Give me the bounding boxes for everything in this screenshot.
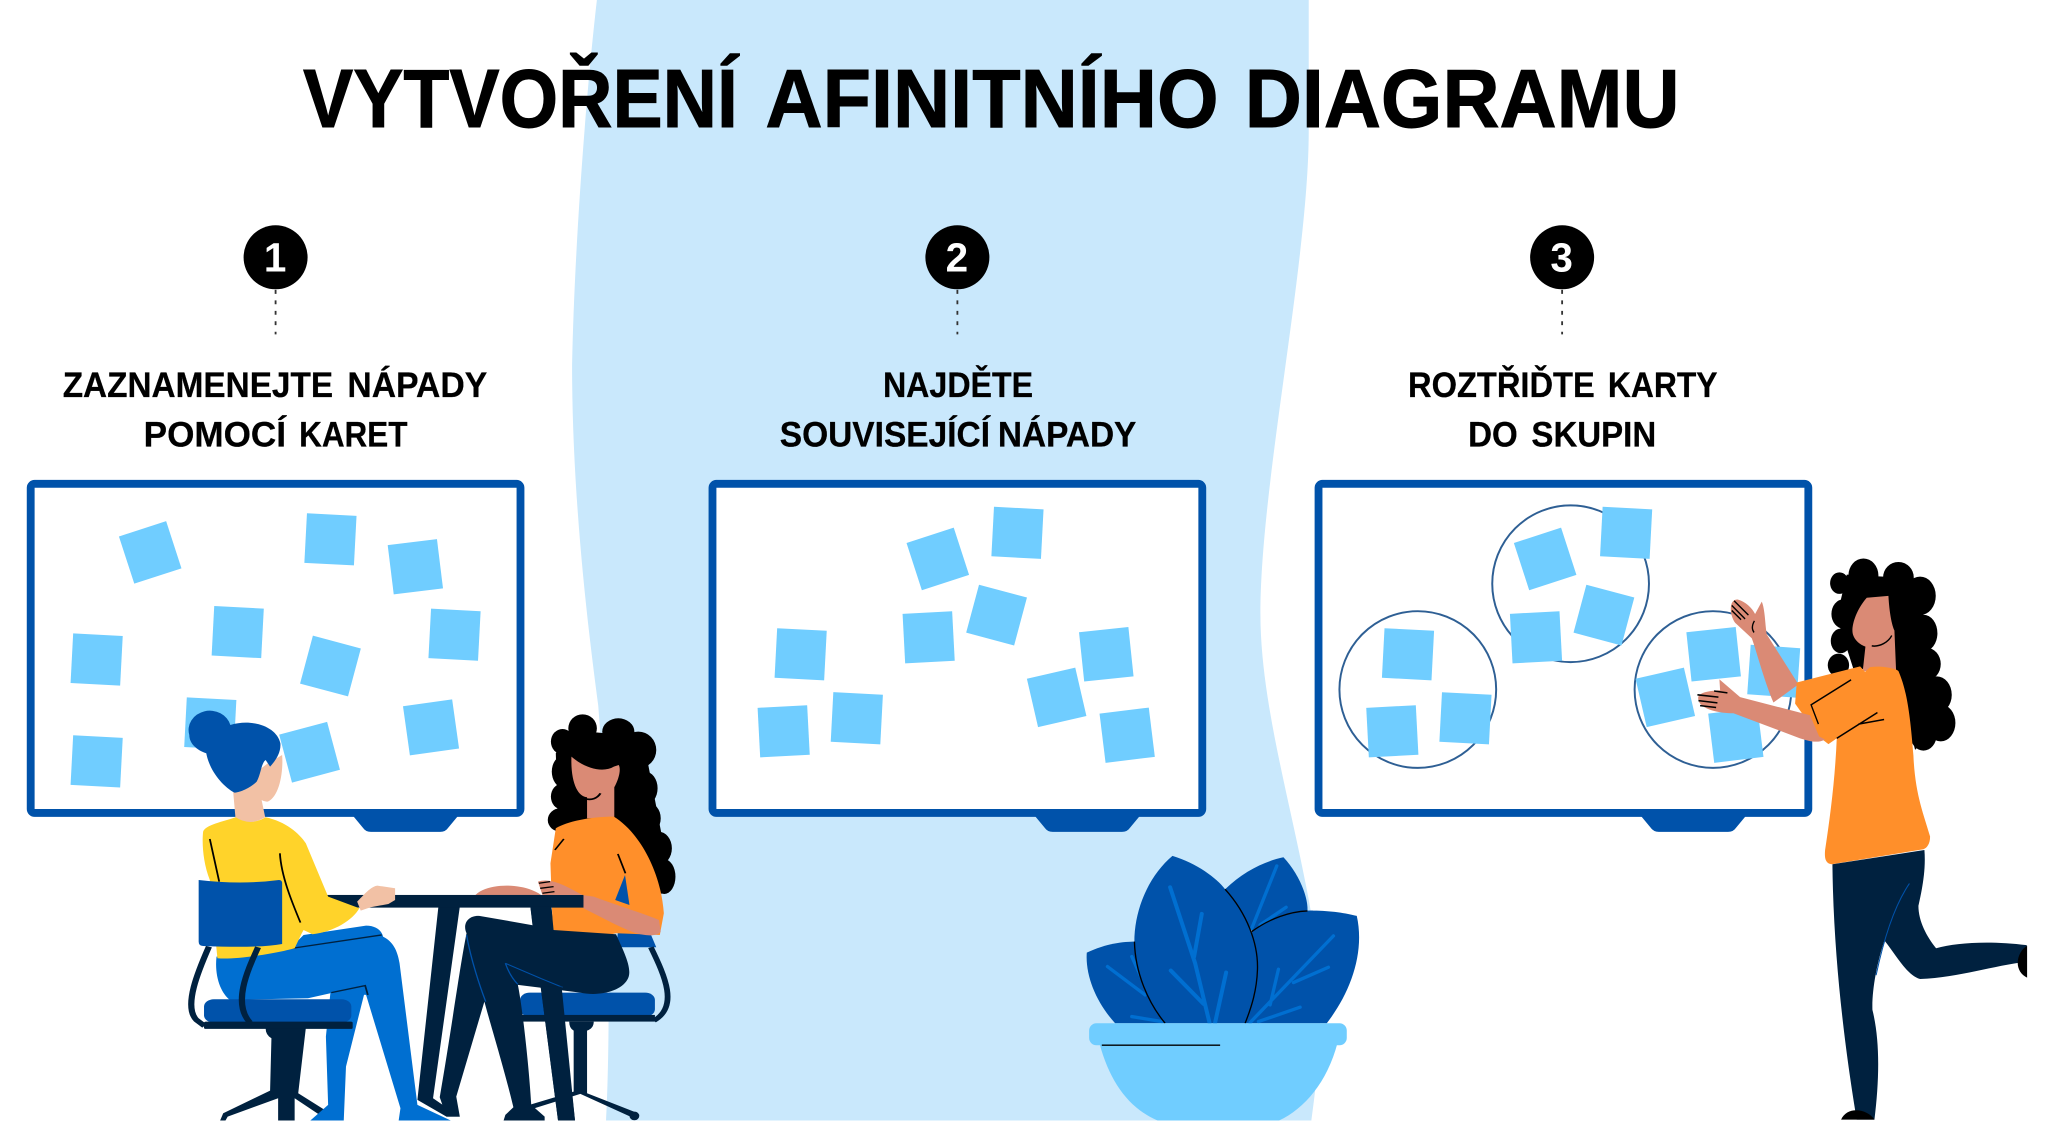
left chair base (220, 1028, 333, 1121)
upper arm (1731, 600, 1798, 703)
step 2 marker (925, 225, 989, 334)
step 2 heading: NÁPADY (998, 415, 1136, 455)
step 1 marker (244, 225, 308, 334)
hair (1828, 558, 1955, 751)
step 1 marker: 1 (264, 235, 286, 281)
shoes (1841, 945, 2028, 1120)
board 3 with grouped notes (1319, 484, 1808, 832)
board 2 with related notes (712, 484, 1202, 832)
board 1 with scattered notes (31, 484, 520, 832)
step 2 marker: 2 (946, 235, 968, 281)
step 1 heading: ZAZNAMENEJTE (63, 366, 333, 405)
step 3 marker: 3 (1550, 235, 1573, 281)
front arm (1698, 679, 1825, 742)
step 2 heading (780, 365, 1136, 455)
title: AFINITNÍHO (765, 54, 1219, 145)
step 3 heading (1408, 365, 1718, 455)
right chair (520, 933, 670, 1120)
step 1 heading: KARET (299, 416, 408, 455)
left woman (189, 711, 451, 1121)
step 1 heading (63, 365, 487, 455)
title: DIAGRAMU (1245, 54, 1680, 145)
title (303, 54, 1680, 145)
illustration: two women at table (189, 711, 675, 1121)
step 1 heading: NÁPADY (347, 365, 487, 405)
step 3 heading: DO (1468, 416, 1518, 455)
step 3 heading: KARTY (1608, 366, 1718, 405)
title: VYTVOŘENÍ (303, 54, 740, 145)
step 3 heading: ROZTŘIĎTE (1408, 365, 1595, 405)
step 2 heading: SOUVISEJÍCÍ (780, 415, 991, 455)
background band (572, 0, 1320, 1120)
step 1 heading: POMOCÍ (144, 415, 287, 455)
step 3 marker (1530, 225, 1594, 334)
step 2 heading: NAJDĚTE (883, 365, 1033, 405)
shirt (1795, 666, 1930, 864)
pot (1089, 1023, 1347, 1122)
leaves (1087, 856, 1359, 1023)
step 3 heading: SKUPIN (1531, 416, 1656, 455)
illustration: woman sorting notes (1697, 558, 2028, 1120)
table legs (417, 907, 575, 1121)
illustration: plant in pot (1087, 856, 1359, 1122)
face (1852, 596, 1896, 671)
trousers (1832, 850, 2027, 1120)
right woman (327, 714, 675, 1121)
